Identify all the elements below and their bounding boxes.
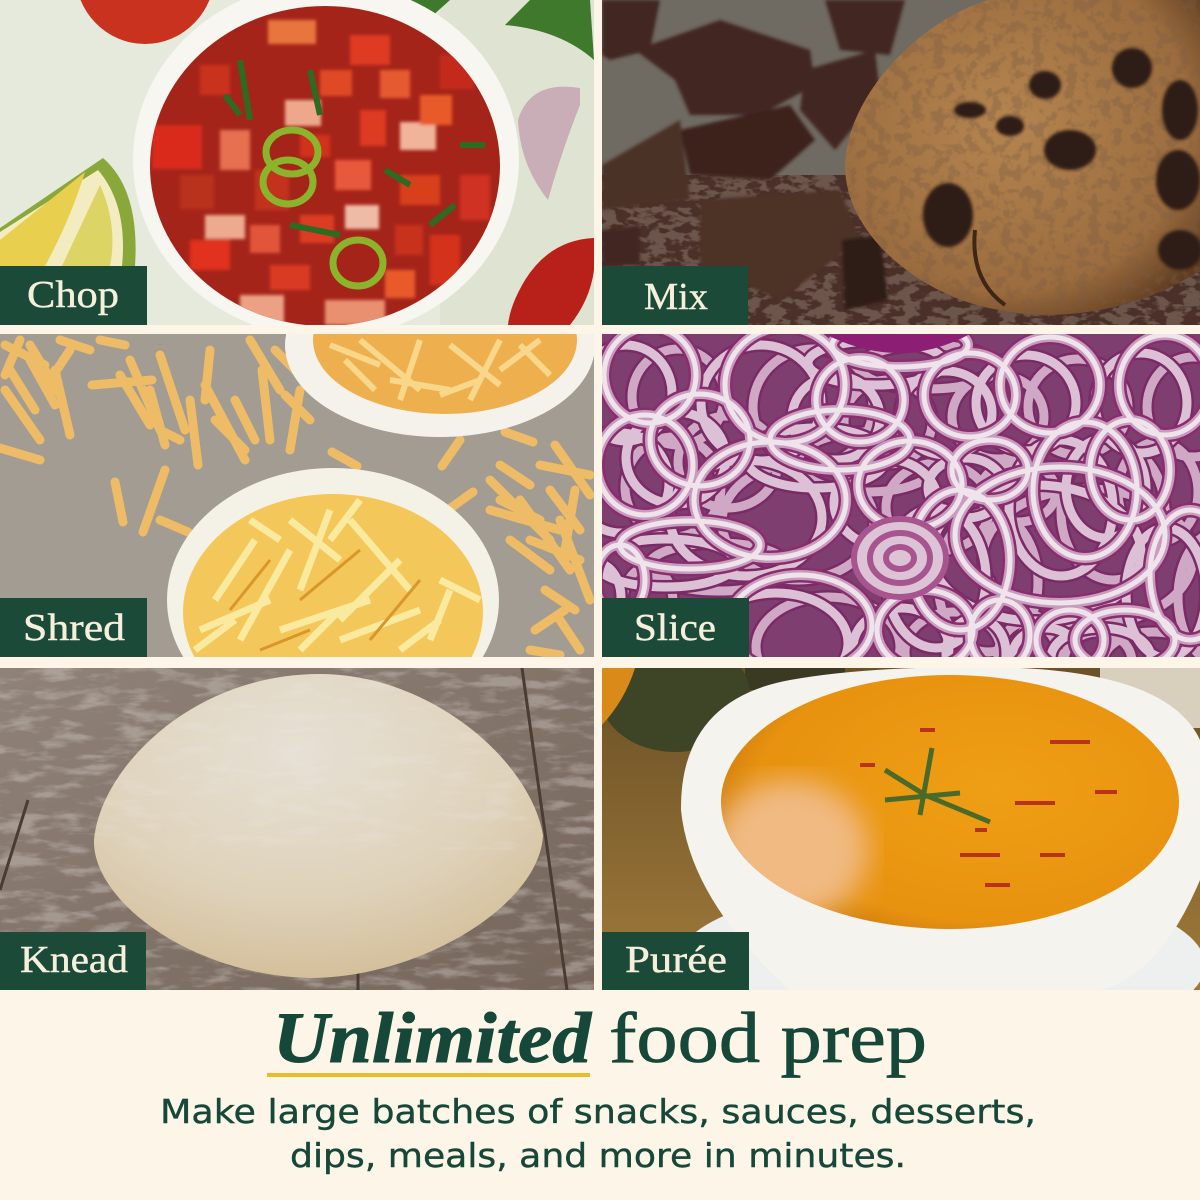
heading: food prep: [609, 998, 927, 1078]
icon: red chili: [508, 238, 594, 325]
heading: Unlimited: [273, 998, 592, 1078]
icon: onion slice centre: [854, 519, 946, 597]
label: knead: Knead: [20, 939, 128, 981]
paprika flecks: [860, 730, 1117, 885]
ball of dough: [90, 670, 545, 978]
soup bowl: [681, 668, 1200, 929]
icon: lime wedge: [0, 158, 136, 266]
label: mix: [602, 266, 748, 325]
label: knead: [0, 932, 146, 990]
chocolate chunks: [602, 0, 905, 310]
panel: knead: [0, 668, 594, 990]
bottom bowl of cheese: [167, 468, 499, 657]
panel: slice: [602, 334, 1200, 657]
heading: [273, 998, 927, 1078]
panel: mix: [602, 0, 1200, 325]
panel: chop: [0, 0, 594, 338]
label: puree: Purée: [625, 939, 727, 981]
label: slice: Slice: [634, 607, 716, 649]
subheading text: Make large batches of snacks, sauces, desserts,: [160, 1092, 1036, 1131]
panel: shred: [0, 334, 594, 657]
icon: jalapeno rings: [263, 130, 383, 286]
label: mix: Mix: [644, 276, 708, 318]
icon: squash: [607, 668, 750, 752]
scattered cheese shreds: [0, 340, 590, 655]
label: puree: [602, 932, 749, 990]
label: slice: [602, 598, 749, 657]
icon: parsley: [410, 0, 594, 60]
label: chop: [0, 266, 147, 325]
top bowl of cheese: [285, 334, 594, 437]
onion rings: [602, 334, 1200, 657]
icon: tomato: [75, 0, 215, 44]
label: shred: Shred: [23, 607, 125, 649]
icon: rosemary sprig: [885, 748, 990, 822]
saucer: [696, 916, 1200, 990]
subheading text: dips, meals, and more in minutes.: [290, 1136, 906, 1175]
bowl of salsa: [133, 0, 519, 338]
purple onion ring accent: [825, 334, 970, 353]
chocolate chip cookie: [840, 0, 1200, 325]
panel: puree: [602, 668, 1200, 990]
subheading text: [160, 1092, 1036, 1175]
label: shred: [0, 598, 147, 657]
label: chop: Chop: [27, 274, 119, 316]
icon: garlic: [518, 87, 580, 200]
heading underline: [267, 1073, 590, 1077]
